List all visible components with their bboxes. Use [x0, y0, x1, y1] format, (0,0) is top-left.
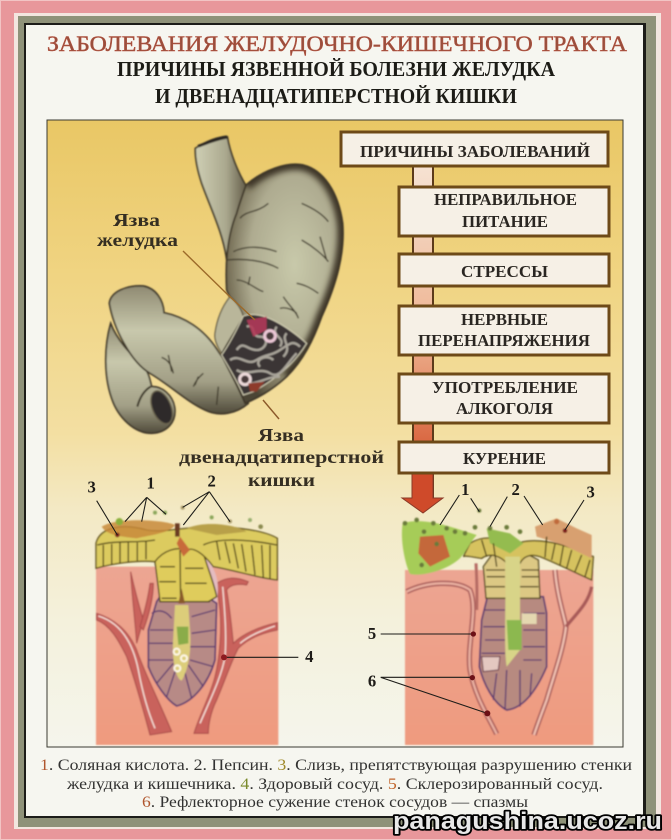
arrow: duodenal ulcer pointer [263, 400, 279, 419]
panel: causes of disease: НЕРВНЫЕ [461, 310, 548, 329]
panel: causes of disease: ПРИЧИНЫ ЗАБОЛЕВАНИЙ [360, 142, 590, 161]
numbers: 4 [305, 647, 314, 666]
panel: causes of disease: АЛКОГОЛЯ [456, 399, 553, 418]
label: duodenal ulcer [179, 425, 384, 490]
label: duodenal ulcer: двенадцатиперстной [179, 447, 384, 467]
legend [40, 757, 632, 811]
connector column [413, 166, 433, 501]
pointer lines [381, 495, 584, 713]
numbers [88, 472, 314, 666]
panel: diseased mucosa diagram [368, 480, 595, 745]
numbers: 2 [208, 472, 216, 491]
panel: causes of disease: ПЕРЕНАПРЯЖЕНИЯ [418, 331, 590, 350]
subtitle [117, 57, 556, 108]
numbers: 2 [512, 480, 520, 499]
arrow: stomach ulcer pointer [183, 251, 255, 320]
subtitle: И ДВЕНАДЦАТИПЕРСТНОЙ КИШКИ [155, 84, 517, 108]
numbers [368, 480, 595, 690]
legend: 1. Соляная кислота. 2. Пепсин. 3. Слизь, препятствующая разрушению стенки [40, 757, 632, 774]
arrow: causes lead to disease [402, 473, 443, 513]
label: duodenal ulcer: кишки [248, 470, 315, 490]
watermark: panagushina.ucoz.ru [393, 808, 662, 835]
pointer lines [97, 492, 298, 657]
panel: causes of disease: ПИТАНИЕ [462, 212, 548, 231]
legend: желудка и кишечника. 4. Здоровый сосуд. 5. Склерозированный сосуд. [66, 776, 603, 793]
numbers: 3 [587, 482, 595, 501]
panel: causes of disease: КУРЕНИЕ [463, 449, 546, 468]
label: stomach ulcer: Язва [113, 210, 160, 230]
numbers: 3 [88, 478, 96, 497]
label: stomach ulcer [97, 210, 178, 250]
numbers: 6 [368, 671, 376, 690]
panel: causes of disease: УПОТРЕБЛЕНИЕ [432, 378, 578, 397]
subtitle: ПРИЧИНЫ ЯЗВЕННОЙ БОЛЕЗНИ ЖЕЛУДКА [117, 57, 556, 81]
panel: healthy mucosa diagram [88, 472, 314, 745]
numbers: 1 [147, 473, 155, 492]
legend: 6. Рефлекторное сужение стенок сосудов — спазмы [142, 794, 529, 811]
title: ЗАБОЛЕВАНИЯ ЖЕЛУДОЧНО-КИШЕЧНОГО ТРАКТА [47, 31, 627, 56]
panel: illustration background [47, 120, 623, 747]
panel: causes of disease [341, 132, 609, 473]
panel: causes of disease: НЕПРАВИЛЬНОЕ [434, 190, 577, 209]
label: stomach ulcer: желудка [97, 230, 178, 250]
panel: causes of disease: СТРЕССЫ [461, 262, 548, 281]
icon: stomach illustration [106, 135, 343, 433]
numbers: 1 [461, 480, 469, 499]
label: duodenal ulcer: Язва [258, 425, 304, 445]
numbers: 5 [368, 624, 376, 643]
